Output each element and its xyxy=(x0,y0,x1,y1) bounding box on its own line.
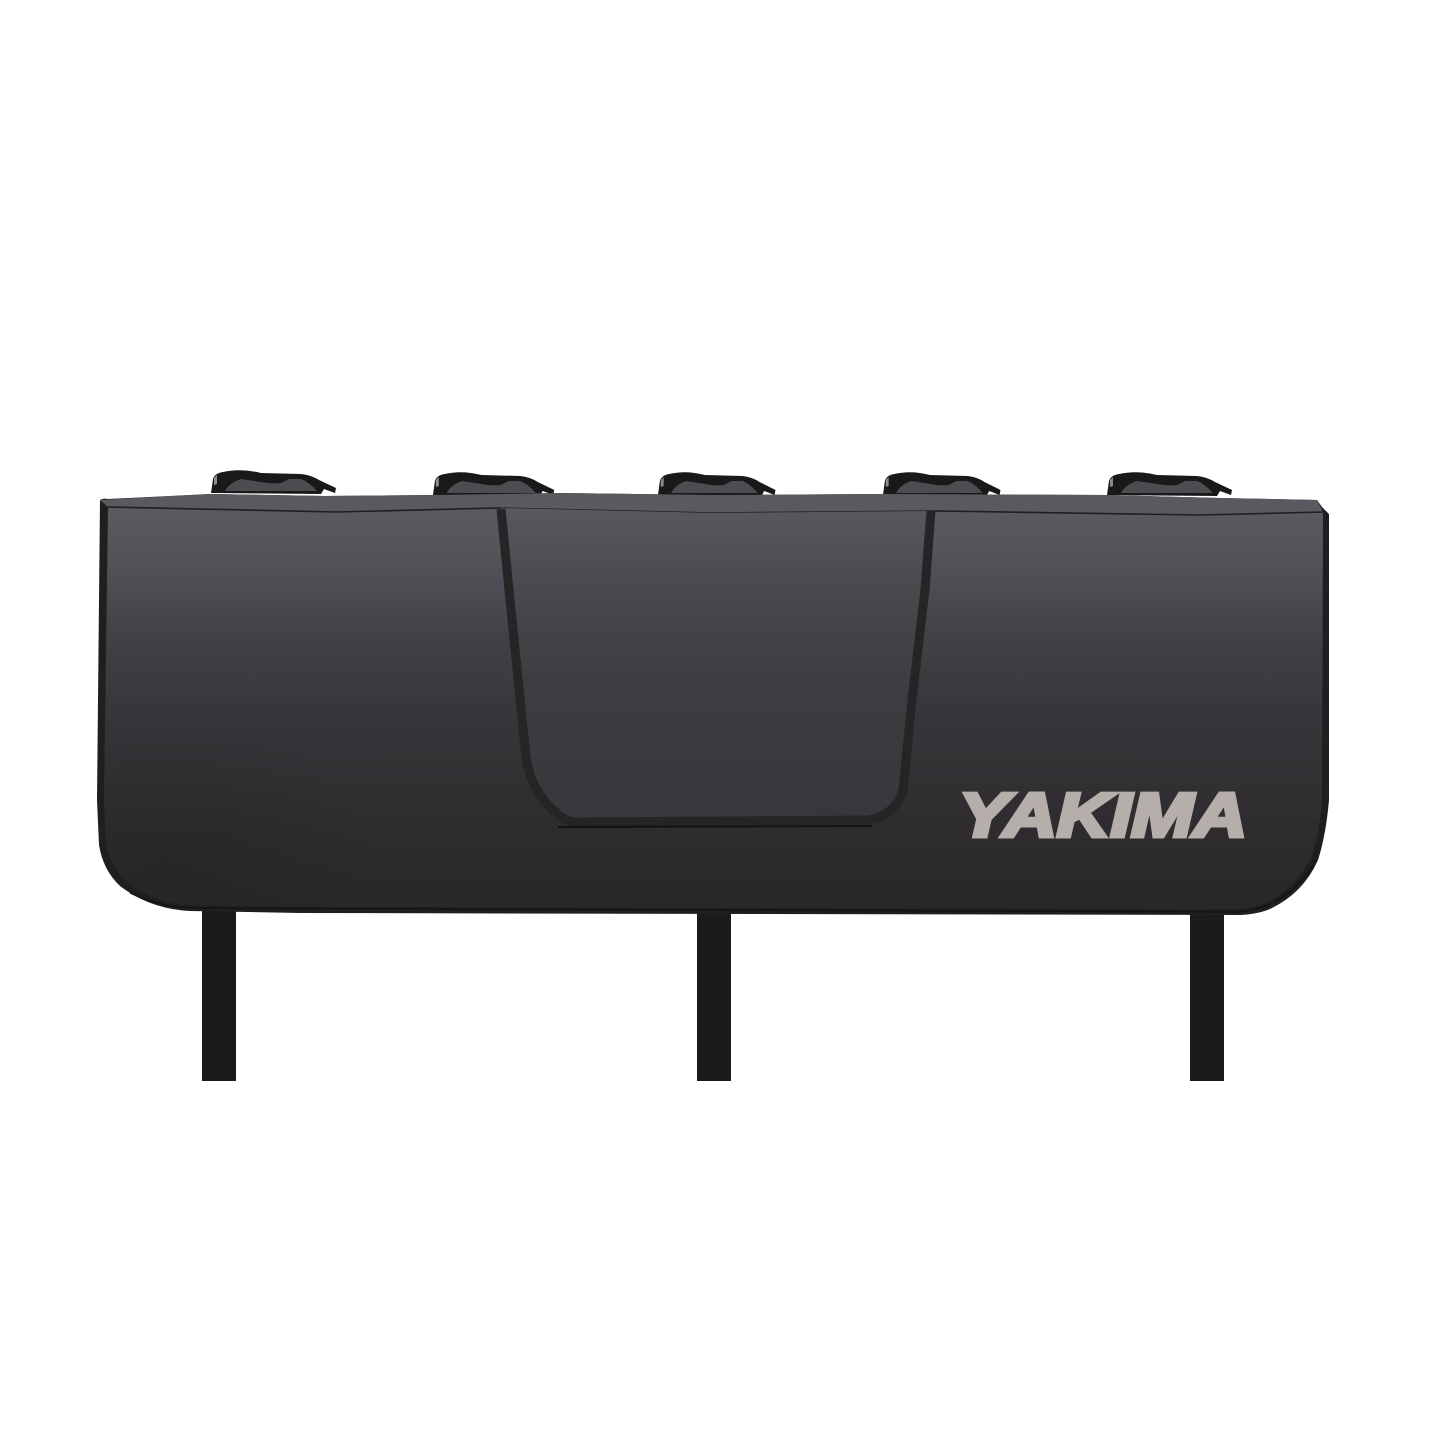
handle 3 xyxy=(658,472,776,496)
left strap xyxy=(202,905,236,1081)
logo: YAKIMA xyxy=(959,782,1247,850)
top seam line xyxy=(108,507,1323,515)
top handles xyxy=(211,470,1232,496)
lower left shading xyxy=(104,620,524,910)
middle strap xyxy=(697,905,731,1081)
handle 5 xyxy=(1107,472,1232,496)
handle 4 xyxy=(883,472,1000,496)
pad shape with binding xyxy=(97,493,1329,915)
pad face xyxy=(104,507,1323,909)
pocket band xyxy=(501,509,931,822)
bottom stitching xyxy=(130,860,1316,912)
product illustration: tailgate pad xyxy=(97,470,1329,1081)
center pocket xyxy=(501,508,931,827)
handle 1 xyxy=(211,470,336,494)
top flap above seam xyxy=(100,493,1323,515)
lower straps xyxy=(202,905,1224,1081)
right strap xyxy=(1190,905,1224,1081)
handle 2 xyxy=(433,472,554,496)
pad body xyxy=(97,493,1329,915)
pocket panel xyxy=(501,508,931,820)
pocket bottom stitch xyxy=(558,826,872,827)
